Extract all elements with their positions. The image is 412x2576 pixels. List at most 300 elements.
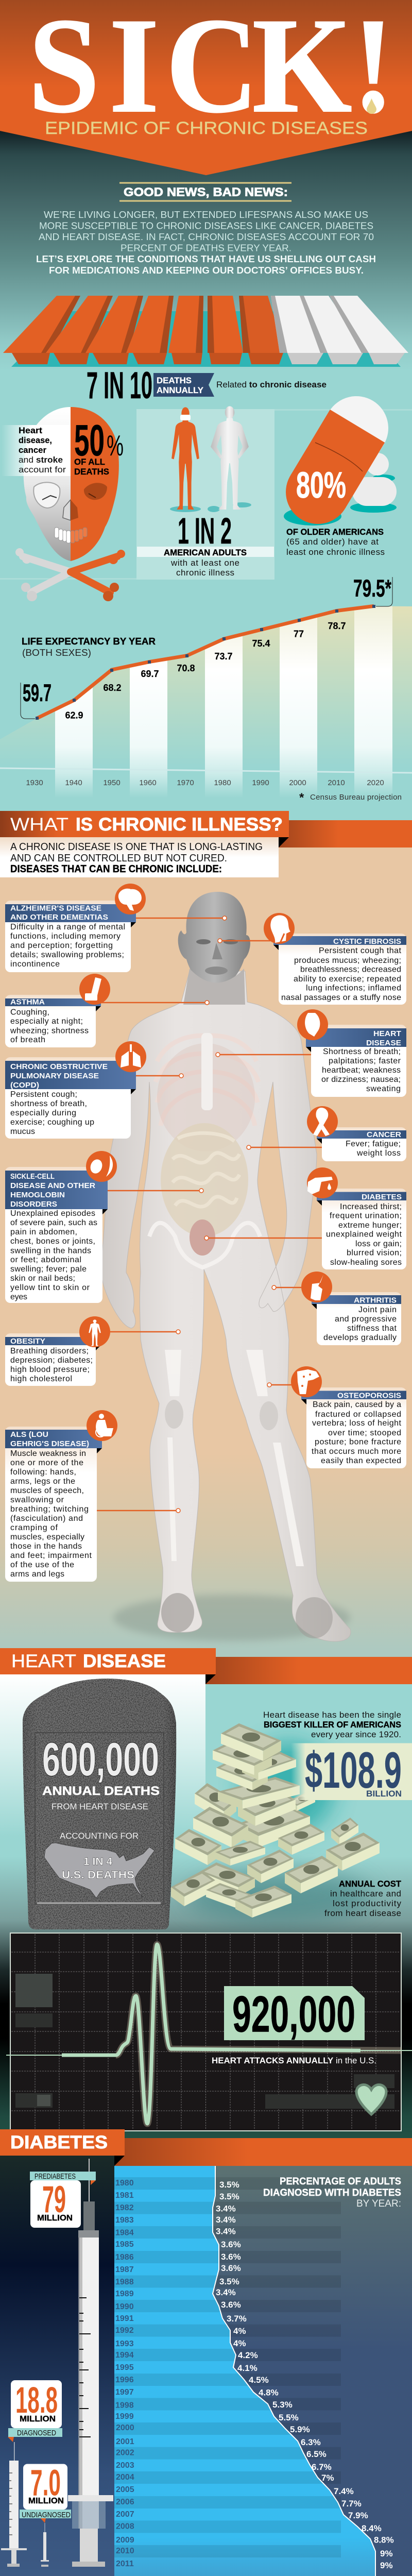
heading: GOOD NEWS, BAD NEWS: — [124, 185, 288, 199]
intestines — [161, 1123, 248, 1236]
callout: diagnosed 18.8 million — [1, 2380, 62, 2567]
chart: percentage of adults diagnosed with diabetes: BY YEAR: — [356, 2198, 401, 2209]
callout: arthritis — [272, 1272, 401, 1345]
callout: heart disease: DISEASE — [366, 1039, 401, 1047]
callout: asthma: Coughing, — [10, 1008, 49, 1017]
label: heart disease cancer stroke — [2, 425, 71, 476]
icon: lungs — [115, 1041, 146, 1072]
chart: life expectancy by year: 77 — [294, 629, 304, 639]
callout: heart disease — [216, 1009, 406, 1097]
trend line — [37, 606, 374, 718]
callout: heart disease: or dizziness; nausea; — [321, 1075, 401, 1084]
legs bones — [165, 1350, 304, 1566]
percentages: 3.5% — [219, 2192, 239, 2201]
years: 1987 — [115, 2265, 134, 2274]
head — [178, 892, 250, 989]
callout: cystic fibrosis — [218, 913, 406, 1005]
callout: copd: PULMONARY DISEASE — [10, 1072, 99, 1080]
percentages: 7% — [321, 2473, 334, 2483]
teeth — [55, 528, 87, 543]
callout: heart disease: palpitations; faster — [329, 1057, 401, 1065]
callout: cystic fibrosis: Persistent cough that — [319, 946, 402, 955]
years — [115, 2179, 134, 2568]
callout: diabetes: unexplained weight — [326, 1230, 402, 1239]
stat: 7 in 10 deaths annually: 7 IN 10 — [87, 365, 152, 406]
percentages: 3.5% — [219, 2180, 239, 2190]
callout: diabetes: slow-healing sores — [330, 1258, 402, 1267]
callout: diabetes: extreme hunger; — [338, 1221, 402, 1230]
callout: cystic fibrosis: lung infections; inflamed — [306, 984, 401, 993]
callout: obesity — [5, 1316, 180, 1386]
callout: copd: exercise; coughing up — [10, 1118, 94, 1127]
callout: diabetes: blurred vision; — [347, 1249, 402, 1258]
callout: asthma: of breath — [10, 1036, 45, 1044]
callout: cancer — [247, 1106, 406, 1161]
callout: sickle-cell — [5, 1151, 203, 1303]
callout: als: swallowing or — [10, 1496, 64, 1504]
callout: alzheimer's: AND OTHER DEMENTIAS — [10, 913, 108, 922]
icon: ribbon — [307, 1106, 338, 1137]
callout: arthritis: and progressive — [335, 1315, 397, 1324]
year axis — [26, 778, 384, 787]
callout: osteoporosis: Back pain, caused by a — [313, 1400, 401, 1409]
callout: osteoporosis: that occurs much more — [312, 1447, 401, 1456]
money pile — [171, 1723, 380, 1922]
percentages: 3.4% — [216, 2287, 236, 2297]
callout: als: and feet; impairment — [10, 1551, 92, 1560]
stat: 80% pills — [284, 426, 397, 557]
stat: $108.9 billion: BILLION — [366, 1789, 402, 1799]
percentages: 3.7% — [227, 2314, 247, 2324]
percentages: 5.5% — [279, 2413, 299, 2422]
years: 1997 — [115, 2388, 134, 2397]
callout: cancer: weight loss — [356, 1149, 401, 1158]
year axis: 2020 — [367, 778, 384, 787]
callout: arthritis: Joint pain — [358, 1306, 397, 1314]
stat: 7 in 10 deaths annually: DEATHS — [157, 376, 192, 385]
callout: als: breathing; twitching — [10, 1505, 89, 1514]
tombstone: 600,000 annual deaths: 600,000 — [42, 1734, 159, 1786]
callout: alzheimer's: ALZHEIMER'S DISEASE — [10, 905, 101, 913]
callout: sickle-cell: swelling; fever; pale — [10, 1265, 87, 1274]
callout: diabetes: DIABETES — [362, 1193, 402, 1201]
intro paragraph: FOR MEDICATIONS AND KEEPING OUR DOCTORS’ OFFICES BUSY. — [49, 265, 364, 276]
percentages: 3.4% — [216, 2204, 236, 2213]
callout: heart disease: Shortness of breath; — [323, 1047, 401, 1056]
callout: alzheimer's — [5, 884, 227, 972]
years: 2011 — [116, 2560, 134, 2568]
callout: osteoporosis — [267, 1366, 406, 1468]
percentages: 3.5% — [219, 2277, 239, 2286]
callout: osteoporosis: over time; stooped — [328, 1429, 401, 1437]
stat: 920,000 — [224, 1986, 365, 2040]
bladder — [190, 1219, 215, 1256]
callout: obesity: high cholesterol — [10, 1375, 72, 1383]
callout: sickle-cell: pain in abdomen, — [10, 1228, 77, 1236]
percentages: 5.9% — [290, 2425, 310, 2434]
percentages: 3.6% — [221, 2300, 241, 2310]
percentages: 4.2% — [238, 2350, 258, 2360]
callout: als: arms and legs — [10, 1570, 64, 1579]
years: 1998 — [115, 2401, 134, 2410]
callout: als — [5, 1410, 180, 1582]
callout: copd: CHRONIC OBSTRUCTIVE — [10, 1063, 108, 1071]
years: 1982 — [115, 2204, 134, 2212]
callout: undiagnosed 7.0 million: UNDIAGNOSED — [22, 2511, 71, 2519]
percentages: 7.4% — [334, 2486, 354, 2496]
tombstone: 600,000 annual deaths: FROM HEART DISEASE — [52, 1802, 148, 1811]
percentages: 4% — [233, 2326, 246, 2336]
callout: cancer: CANCER — [367, 1131, 402, 1139]
figure: translucent human body — [101, 892, 351, 1641]
callout: alzheimer's: details; swallowing problems; — [10, 951, 124, 959]
callout: sickle-cell: of severe pain, such as — [10, 1218, 97, 1227]
callout: cancer: Fever; fatigue; — [346, 1140, 401, 1148]
callout: diabetes: frequent urination; — [330, 1212, 402, 1220]
heart disease cost text: lost productivity — [333, 1899, 402, 1908]
ecg monitor panel: 920,000 — [232, 1986, 355, 2042]
callout: alzheimer's: Difficulty in a range of mental — [10, 923, 125, 931]
callout: osteoporosis: posture; bone fracture — [315, 1437, 401, 1447]
icon: bone — [291, 1366, 322, 1397]
callout: diabetes: loss or gain; — [355, 1240, 402, 1248]
callout: alzheimer's: and perception; forgetting — [10, 941, 113, 950]
callout: copd — [5, 1041, 183, 1139]
callout: prediabetes 79 million: MILLION — [37, 2214, 73, 2223]
years: 1996 — [115, 2376, 134, 2384]
years: 1985 — [115, 2240, 134, 2249]
callout: obesity: Breathing disorders; — [10, 1347, 89, 1355]
stat: 50%: 50 — [74, 416, 105, 465]
percentages: 7.7% — [341, 2499, 362, 2509]
ecg monitor panel — [6, 1933, 412, 2131]
title banner — [0, 0, 412, 175]
stat: 7 in 10 deaths annually — [87, 365, 327, 406]
callout: sickle-cell: eyes — [10, 1293, 27, 1301]
section header: what is chronic illness: CHRONIC ILLNESS? — [98, 815, 283, 835]
callout: prediabetes 79 million — [30, 2172, 96, 2228]
callout: heart disease: heartbeat; weakness — [322, 1066, 401, 1075]
percentages: 4.8% — [259, 2387, 279, 2398]
stat: 1 in 2 american adults: AMERICAN ADULTS — [164, 548, 247, 557]
chart: life expectancy by year: 73.7 — [214, 651, 233, 662]
years: 1981 — [115, 2191, 134, 2200]
pelvis — [149, 1223, 260, 1267]
callout: als: (fasciculation) and — [10, 1514, 83, 1523]
callout: alzheimer's: functions, including memory — [10, 932, 121, 941]
callout: copd: shortness of breath, — [10, 1099, 87, 1108]
year axis: 1940 — [65, 778, 82, 787]
percentages: 3.6% — [221, 2252, 241, 2262]
section header: heart disease: DISEASE — [83, 1651, 166, 1671]
callout: cystic fibrosis: produces mucus; wheezing; — [294, 956, 401, 965]
callout: copd: especially during — [10, 1109, 76, 1117]
callout: cystic fibrosis: CYSTIC FIBROSIS — [333, 938, 401, 946]
icon: drop — [367, 98, 376, 114]
section header: what is chronic illness: WHAT — [10, 815, 68, 835]
years: 2004 — [116, 2473, 134, 2482]
callout: prediabetes 79 million: 79 — [42, 2179, 66, 2221]
callout: copd: Persistent cough; — [10, 1090, 77, 1099]
figure: white man — [208, 406, 251, 512]
tombstone: 600,000 annual deaths — [21, 1674, 180, 1932]
callout: diagnosed 18.8 million: MILLION — [20, 2415, 56, 2424]
callout: arthritis: stiffness that — [347, 1324, 397, 1333]
callout: asthma: wheezing; shortness — [10, 1026, 89, 1036]
callout: als: of the use of the — [10, 1561, 74, 1569]
percentages: 4% — [233, 2338, 246, 2348]
icon: throat — [264, 913, 295, 944]
heart disease cost text: every year since 1920. — [311, 1730, 401, 1739]
percentages: 5.3% — [272, 2400, 293, 2410]
percentages — [216, 2180, 394, 2570]
year axis: 1960 — [139, 778, 157, 787]
callout: als: cramping of — [10, 1523, 58, 1532]
icon: inhaler — [79, 974, 110, 1005]
map: United States — [44, 1843, 154, 1898]
note: census projection: * — [299, 791, 304, 805]
callout: als: ALS (LOU — [10, 1431, 48, 1439]
chart: life expectancy by year — [0, 574, 412, 805]
callout: sickle-cell: HEMOGLOBIN — [10, 1191, 65, 1199]
icon: finger prick — [307, 1167, 338, 1198]
ribs — [156, 1036, 259, 1126]
percentages: 3.4% — [216, 2227, 236, 2236]
percentages: 9% — [380, 2549, 393, 2558]
callout: diagnosed 18.8 million: DIAGNOSED — [17, 2429, 56, 2437]
callout: arthritis: develops gradually — [323, 1333, 397, 1342]
years: 1986 — [115, 2253, 134, 2262]
stat: 80% pills: 80% — [296, 465, 346, 506]
callout: obesity: depression; diabetes; — [10, 1356, 93, 1365]
callout: sickle-cell: or feet; abdominal — [10, 1256, 81, 1264]
years: 1993 — [115, 2340, 134, 2348]
stat: 7 in 10 deaths annually: Related to chronic disease — [216, 380, 327, 389]
percentages: 3.4% — [216, 2215, 236, 2225]
callout: als: muscles of speech, — [10, 1486, 84, 1495]
skull and crossbones — [2, 407, 125, 601]
percentages: 9% — [380, 2561, 393, 2570]
heart disease cost text: in healthcare and — [330, 1889, 401, 1899]
callout: cystic fibrosis: nasal passages or a stuffy nose — [281, 993, 401, 1002]
chart title: LIFE EXPECTANCY BY YEAR — [22, 636, 156, 647]
percentages: 7.9% — [348, 2511, 368, 2520]
callout: osteoporosis: fractured or collapsed — [315, 1410, 401, 1419]
callout: cystic fibrosis: ability to exercise; repeated — [294, 975, 401, 984]
callout: heart disease: sweating — [366, 1084, 401, 1093]
years: 2000 — [116, 2424, 134, 2432]
callout: sickle-cell: Unexplained episodes — [10, 1209, 95, 1218]
subtitle: EPIDEMIC OF CHRONIC DISEASES — [45, 118, 368, 138]
intro paragraph: WE’RE LIVING LONGER, BUT EXTENDED LIFESPANS ALSO MAKE US — [44, 210, 368, 220]
callout: copd: mucus — [10, 1127, 35, 1136]
chart title: PERCENTAGE OF ADULTS — [280, 2176, 401, 2187]
section header: heart disease — [0, 1648, 412, 1684]
section header: what is chronic illness: DISEASES THAT CAN BE CHRONIC INCLUDE: — [10, 863, 222, 875]
caskets: 7 orange, 3 white — [3, 296, 408, 367]
percentages: 4.5% — [249, 2375, 269, 2385]
intro paragraph: MORE SUSCEPTIBLE TO CHRONIC DISEASES LIKE CANCER, DIABETES — [39, 221, 373, 231]
year axis: 1980 — [214, 778, 231, 787]
years: 1988 — [115, 2278, 134, 2286]
intro paragraph: LET’S EXPLORE THE CONDITIONS THAT HAVE US SHELLING OUT CASH — [36, 254, 376, 264]
skull and crossbones: OF ALL — [74, 457, 105, 467]
years: 1994 — [115, 2351, 134, 2360]
callout: obesity: high blood pressure; — [10, 1365, 90, 1374]
callout: undiagnosed 7.0 million — [20, 2463, 71, 2567]
ribbon: deaths annually — [153, 373, 214, 397]
panel: light center panel — [136, 409, 274, 580]
stat: 1 in 2 american adults: with at least one — [170, 558, 239, 568]
percentages: 4.1% — [237, 2363, 258, 2373]
callout: sickle-cell: chest, bones or joints, — [10, 1237, 95, 1246]
callout: sickle-cell: SICKLE-CELL — [10, 1173, 55, 1181]
callout: obesity: OBESITY — [10, 1337, 45, 1346]
tombstone: 600,000 annual deaths: ANNUAL DEATHS — [42, 1784, 160, 1798]
intro paragraph: PERCENT OF DEATHS EVERY YEAR. — [121, 243, 291, 253]
chart: life expectancy by year: 70.8 — [177, 663, 195, 673]
callout: sickle-cell: DISEASE AND OTHER — [10, 1182, 96, 1190]
years: 2007 — [116, 2510, 134, 2519]
callout: asthma: ASTHMA — [10, 998, 45, 1007]
callout: heart disease: HEART — [373, 1030, 401, 1038]
icon: obese figure — [79, 1316, 110, 1347]
percentages: 3.6% — [221, 2263, 241, 2273]
data labels: 59.7 — [23, 679, 52, 706]
callout: diabetes — [204, 1167, 406, 1269]
skull and crossbones: and stroke — [19, 455, 63, 465]
callout: asthma — [5, 974, 209, 1047]
years: 2005 — [116, 2485, 134, 2494]
callout: als: following: hands, — [10, 1468, 76, 1477]
stat: 1 in 2 american adults: 1 IN 2 — [178, 511, 232, 552]
tombstone: 600,000 annual deaths: 1 IN 4 — [83, 1856, 112, 1868]
years: 1995 — [115, 2363, 134, 2372]
skull and crossbones: Heart — [19, 426, 42, 435]
callout: undiagnosed 7.0 million: MILLION — [28, 2497, 64, 2505]
year axis: 2010 — [328, 778, 345, 787]
years: 1984 — [115, 2229, 134, 2237]
years: 1983 — [115, 2216, 134, 2225]
section header: heart disease: HEART — [11, 1651, 76, 1671]
heart disease cost text: from heart disease — [324, 1908, 401, 1918]
chart: life expectancy by year: Census Bureau projection — [310, 793, 402, 802]
callout: cystic fibrosis: breathlessness; decreased — [300, 965, 401, 974]
years: 2001 — [116, 2437, 134, 2446]
skull and crossbones: cancer — [19, 445, 46, 455]
callout: copd: (COPD) — [10, 1081, 39, 1090]
callout: sickle-cell: skin or nail beds; — [10, 1274, 75, 1283]
years: 1980 — [115, 2179, 134, 2188]
section header: diabetes — [0, 2129, 412, 2166]
years: 1991 — [115, 2314, 134, 2323]
years: 1999 — [115, 2412, 134, 2421]
stat: 80% pills: least one chronic illness — [286, 547, 385, 557]
years: 2009 — [116, 2536, 134, 2545]
callout: als: those in the hands — [10, 1542, 82, 1551]
callout: als: GEHRIG'S DISEASE) — [10, 1440, 89, 1448]
heart disease cost text: ANNUAL COST — [339, 1879, 402, 1889]
callout: alzheimer's: incontinence — [10, 960, 60, 969]
chart: life expectancy by year: 62.9 — [65, 710, 83, 720]
callout: als: one or more of the — [10, 1459, 83, 1467]
chart: life expectancy by year: 79.5* — [353, 574, 391, 602]
icon: blood cells — [86, 1151, 117, 1182]
callout: arthritis: ARTHRITIS — [354, 1297, 397, 1305]
ecg monitor panel: HEART ATTACKS ANNUALLY in the U.S. — [212, 2056, 376, 2065]
years: 2010 — [116, 2547, 134, 2555]
percentages: 8.8% — [374, 2535, 394, 2545]
callout: sickle-cell: yellow tint to skin or — [10, 1283, 90, 1292]
years: 2008 — [116, 2522, 134, 2531]
year axis: 2000 — [289, 778, 306, 787]
callout: sickle-cell: swelling in the hands — [10, 1247, 91, 1255]
callout: diagnosed 18.8 million: 18.8 — [15, 2380, 58, 2421]
intro paragraph: AND HEART DISEASE. IN FACT, CHRONIC DISEASES ACCOUNT FOR 70 — [39, 232, 374, 242]
section header: diabetes: DIABETES — [10, 2132, 108, 2153]
tombstone: 600,000 annual deaths: U.S. DEATHS — [62, 1869, 134, 1881]
callout: als: Muscle weakness in — [10, 1449, 86, 1458]
years: 2003 — [116, 2461, 134, 2470]
stat: 80% pills: (65 and older) have at — [286, 537, 379, 547]
years: 1992 — [115, 2326, 134, 2335]
skull and crossbones: account for — [19, 465, 66, 474]
feet — [161, 1593, 194, 1632]
intro: good news bad news — [36, 182, 376, 276]
chart: life expectancy by year: 68.2 — [103, 683, 122, 693]
callout: als: muscles, especially — [10, 1533, 84, 1541]
percentages: 6.7% — [312, 2462, 332, 2472]
callout: osteoporosis: OSTEOPOROSIS — [337, 1392, 401, 1400]
heart disease cost text: BIGGEST KILLER OF AMERICANS — [264, 1720, 401, 1730]
section header: what is chronic illness: AND CAN BE CONTROLLED BUT NOT CURED. — [10, 853, 227, 864]
skull and crossbones: % — [107, 429, 124, 462]
callout: prediabetes 79 million: PREDIABETES — [35, 2172, 76, 2181]
heartbeat trace — [6, 1944, 412, 2124]
percentages: 3.6% — [221, 2240, 241, 2249]
callout: diabetes: Increased thirst; — [340, 1202, 402, 1211]
chart: life expectancy by year: 69.7 — [141, 669, 159, 679]
icon: heart — [356, 2084, 386, 2114]
year axis: 1950 — [103, 778, 121, 787]
stat: 80% pills: OF OLDER AMERICANS — [286, 527, 384, 537]
years: 1990 — [115, 2302, 134, 2311]
heart disease cost text — [263, 1710, 412, 1918]
figure: orange man in mask — [170, 407, 201, 512]
syringe: large prediabetes — [68, 2159, 113, 2567]
callout: als: arms, legs or the — [10, 1477, 75, 1486]
chart: life expectancy by year: (BOTH SEXES) — [22, 648, 91, 658]
callout: osteoporosis: easily than expected — [321, 1456, 401, 1465]
icon: wheelchair — [87, 1410, 117, 1441]
percentages: 6.3% — [301, 2437, 321, 2447]
definition box — [0, 837, 279, 877]
stat: 1 in 2 american adults: chronic illness — [176, 568, 234, 578]
chart: life expectancy by year: 78.7 — [328, 621, 346, 631]
tombstone: 600,000 annual deaths: ACCOUNTING FOR — [60, 1831, 139, 1841]
icon: brain — [115, 884, 146, 914]
years: 1989 — [115, 2290, 134, 2298]
icon: hand — [301, 1272, 332, 1302]
stat: 1 in 2 american adults — [137, 406, 274, 578]
icon: heart — [297, 1009, 328, 1040]
percentages: 8.4% — [362, 2523, 382, 2533]
intro paragraph — [36, 210, 376, 276]
chart: percentage of adults diagnosed with diabetes — [114, 2166, 401, 2576]
section header: what is chronic illness: A CHRONIC DISEASE IS ONE THAT IS LONG-LASTING — [10, 841, 263, 853]
section header: what is chronic illness — [0, 811, 412, 877]
heart disease cost text: Heart disease has been the single — [263, 1710, 401, 1720]
